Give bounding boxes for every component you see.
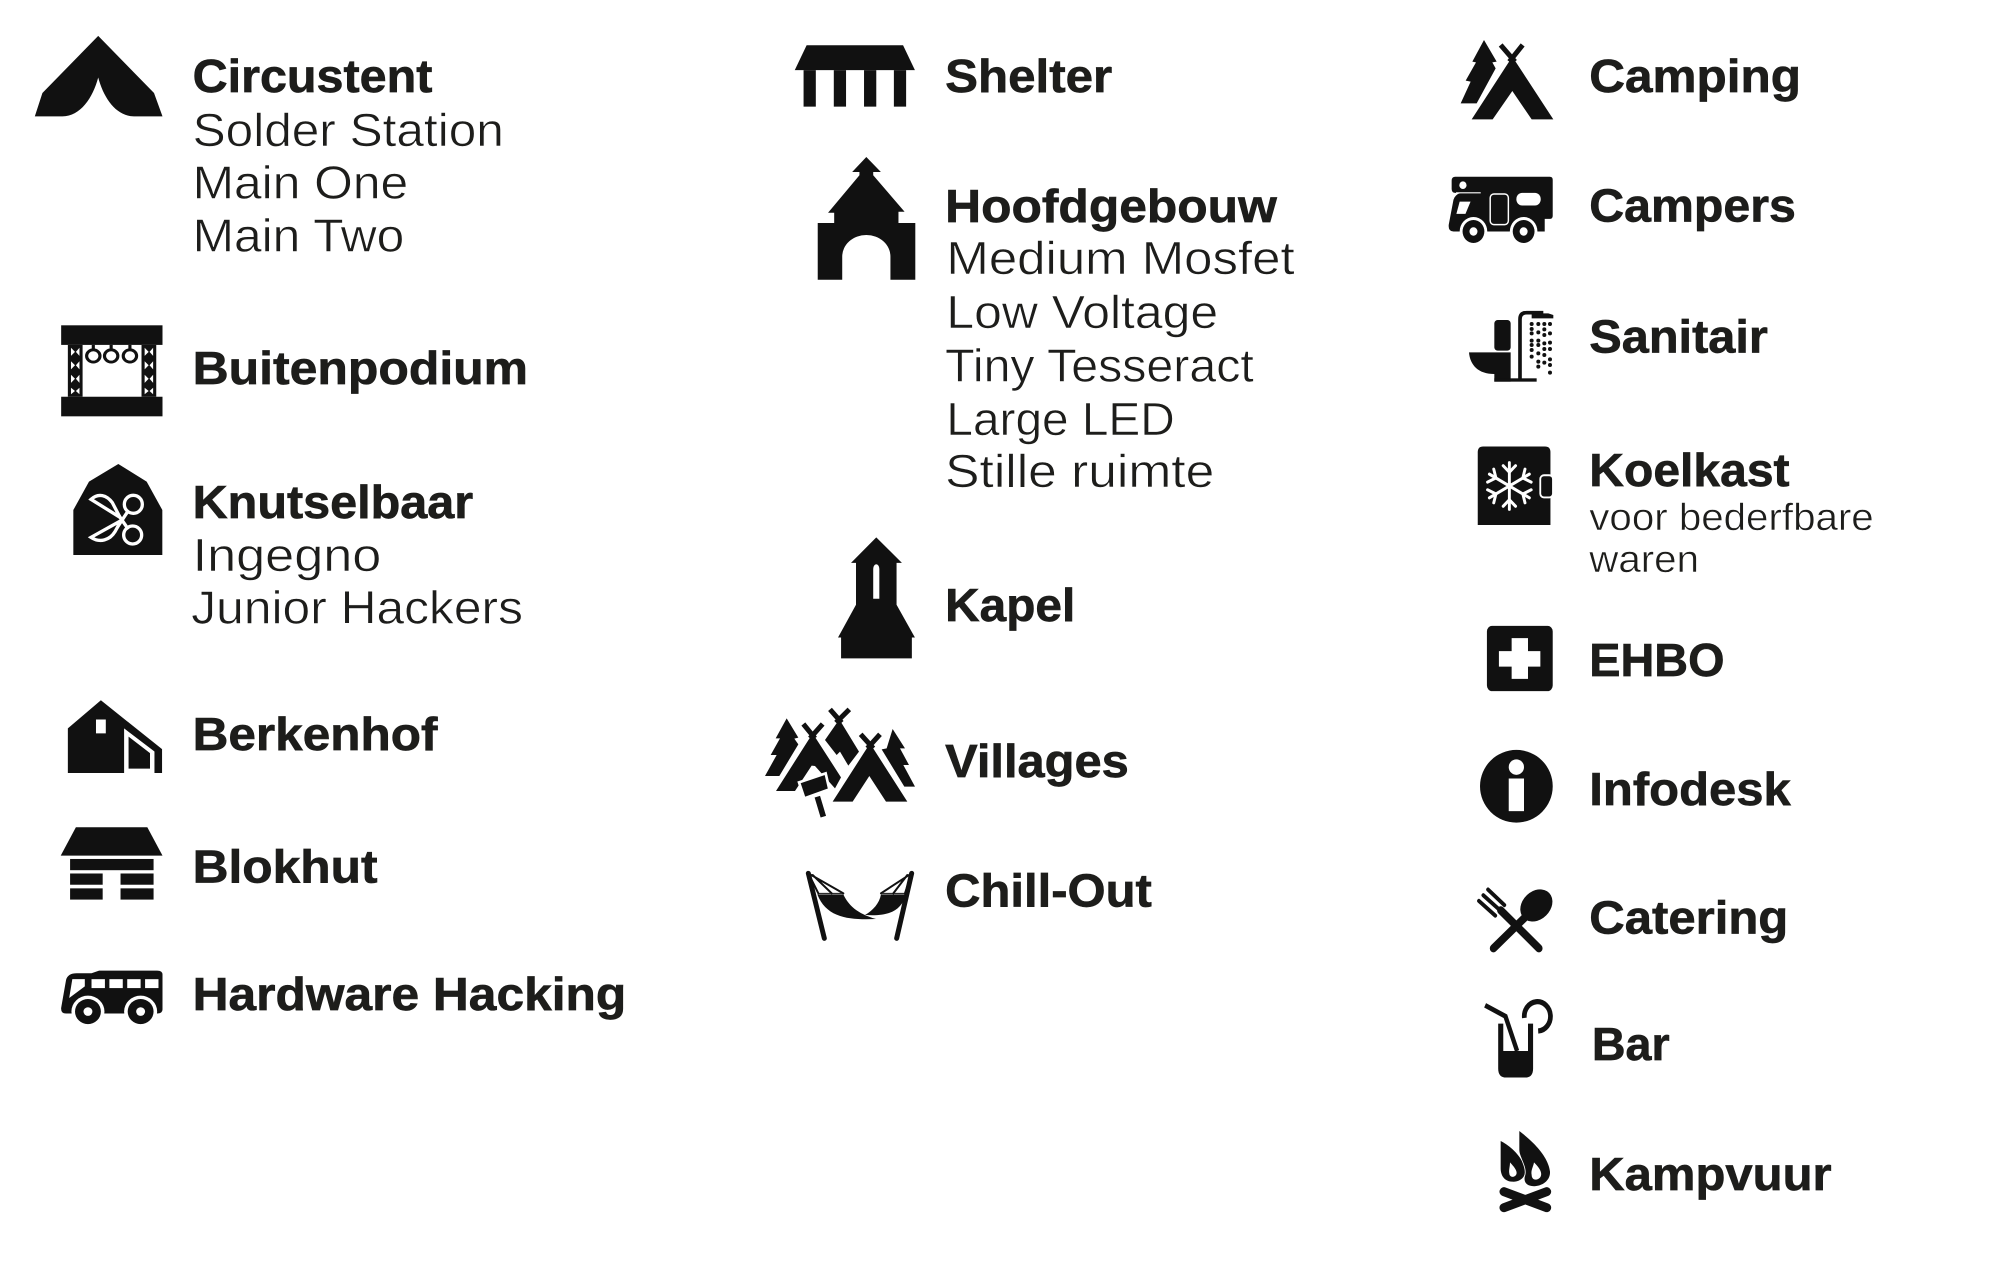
text: Circustent: Circustent [193, 50, 432, 102]
row: Catering [1479, 883, 1788, 948]
icon: stage [61, 325, 163, 416]
icon: camper van [1449, 177, 1553, 246]
icon: campfire [1501, 1131, 1550, 1208]
icon: main building [818, 157, 915, 280]
text: Bar: Bar [1592, 1018, 1670, 1070]
text: Koelkast [1588, 444, 1874, 581]
row: Kapel [838, 537, 1075, 658]
text: Knutselbaar: Knutselbaar [193, 476, 473, 528]
icon: tree and tent [1461, 40, 1553, 119]
row: Shelter [795, 45, 1112, 107]
text: Knutselbaar: Ingegno [193, 529, 381, 581]
text: Koelkast: voor bederfbare [1589, 496, 1874, 539]
row: Campers [1449, 177, 1796, 246]
column: right [1449, 40, 1874, 1208]
text: Sanitair: Sanitair [1589, 311, 1768, 363]
text: Circustent: Main One [193, 156, 408, 208]
row: EHBO [1487, 626, 1724, 691]
icon: log cabin [61, 827, 163, 900]
text: Hoofdgebouw: Hoofdgebouw [945, 180, 1277, 232]
row: Knutselbaar [73, 464, 523, 634]
row: Kampvuur [1501, 1131, 1832, 1208]
text: Blokhut: Blokhut [193, 841, 378, 893]
row: Circustent [35, 36, 504, 261]
icon: info circle [1480, 750, 1553, 823]
row: Berkenhof [68, 700, 438, 773]
row: Koelkast [1478, 444, 1874, 581]
column: middle [765, 45, 1295, 938]
icon: fork and spoon [1479, 883, 1558, 948]
column: left [35, 36, 626, 1027]
row: Infodesk [1480, 750, 1791, 823]
icon: cocktail glass [1485, 1002, 1550, 1078]
icon: first aid cross [1487, 626, 1553, 691]
text: Circustent: Solder Station [193, 104, 504, 156]
text: Chill-Out: Chill-Out [945, 864, 1152, 916]
text: Knutselbaar [191, 476, 523, 634]
text: Hoofdgebouw: Medium Mosfet [946, 232, 1295, 284]
icon: bus [61, 971, 163, 1027]
text: Kapel: Kapel [945, 579, 1075, 631]
text: Circustent [193, 50, 504, 261]
text: Villages: Villages [945, 735, 1129, 787]
text: Berkenhof: Berkenhof [193, 708, 438, 760]
row: Buitenpodium [61, 325, 528, 416]
text: Buitenpodium: Buitenpodium [193, 342, 528, 394]
text: Kampvuur: Kampvuur [1589, 1148, 1832, 1200]
text: Hoofdgebouw: Stille ruimte [945, 445, 1214, 497]
row: Camping [1461, 40, 1801, 119]
text: Camping: Camping [1589, 50, 1801, 102]
icon: barn with scissors [73, 464, 162, 555]
text: Hardware Hacking: Hardware Hacking [193, 968, 626, 1020]
text: Hoofdgebouw: Tiny Tesseract [945, 339, 1254, 391]
text: Catering: Catering [1589, 892, 1788, 944]
row: Hoofdgebouw [818, 157, 1295, 497]
text: Hoofdgebouw: Low Voltage [946, 286, 1218, 338]
text: Shelter: Shelter [945, 50, 1112, 102]
row: Hardware Hacking [61, 968, 626, 1027]
text: Koelkast: waren [1588, 538, 1699, 581]
text: Infodesk: Infodesk [1589, 763, 1791, 815]
row: Blokhut [61, 827, 378, 900]
icon: hammock [808, 873, 912, 938]
text: Knutselbaar: Junior Hackers [191, 582, 523, 634]
row: Villages [765, 709, 1129, 817]
icon: farmhouse [68, 700, 162, 773]
text: Campers: Campers [1589, 179, 1796, 231]
icon: fridge with snowflake [1478, 447, 1553, 525]
icon: chapel [838, 537, 915, 658]
text: Circustent: Main Two [193, 209, 404, 261]
text: EHBO: EHBO [1589, 634, 1724, 686]
row: Chill-Out [808, 864, 1152, 938]
icon: tents, trees and sign [765, 709, 915, 817]
text: Koelkast: Koelkast [1589, 444, 1790, 496]
icon: toilet and shower [1469, 313, 1553, 382]
text: Hoofdgebouw: Large LED [946, 393, 1175, 445]
row: Sanitair [1469, 311, 1768, 382]
icon: circus tent [35, 36, 163, 116]
icon: shelter [795, 45, 915, 107]
text: Hoofdgebouw [945, 180, 1295, 497]
row: Bar [1485, 1002, 1670, 1078]
